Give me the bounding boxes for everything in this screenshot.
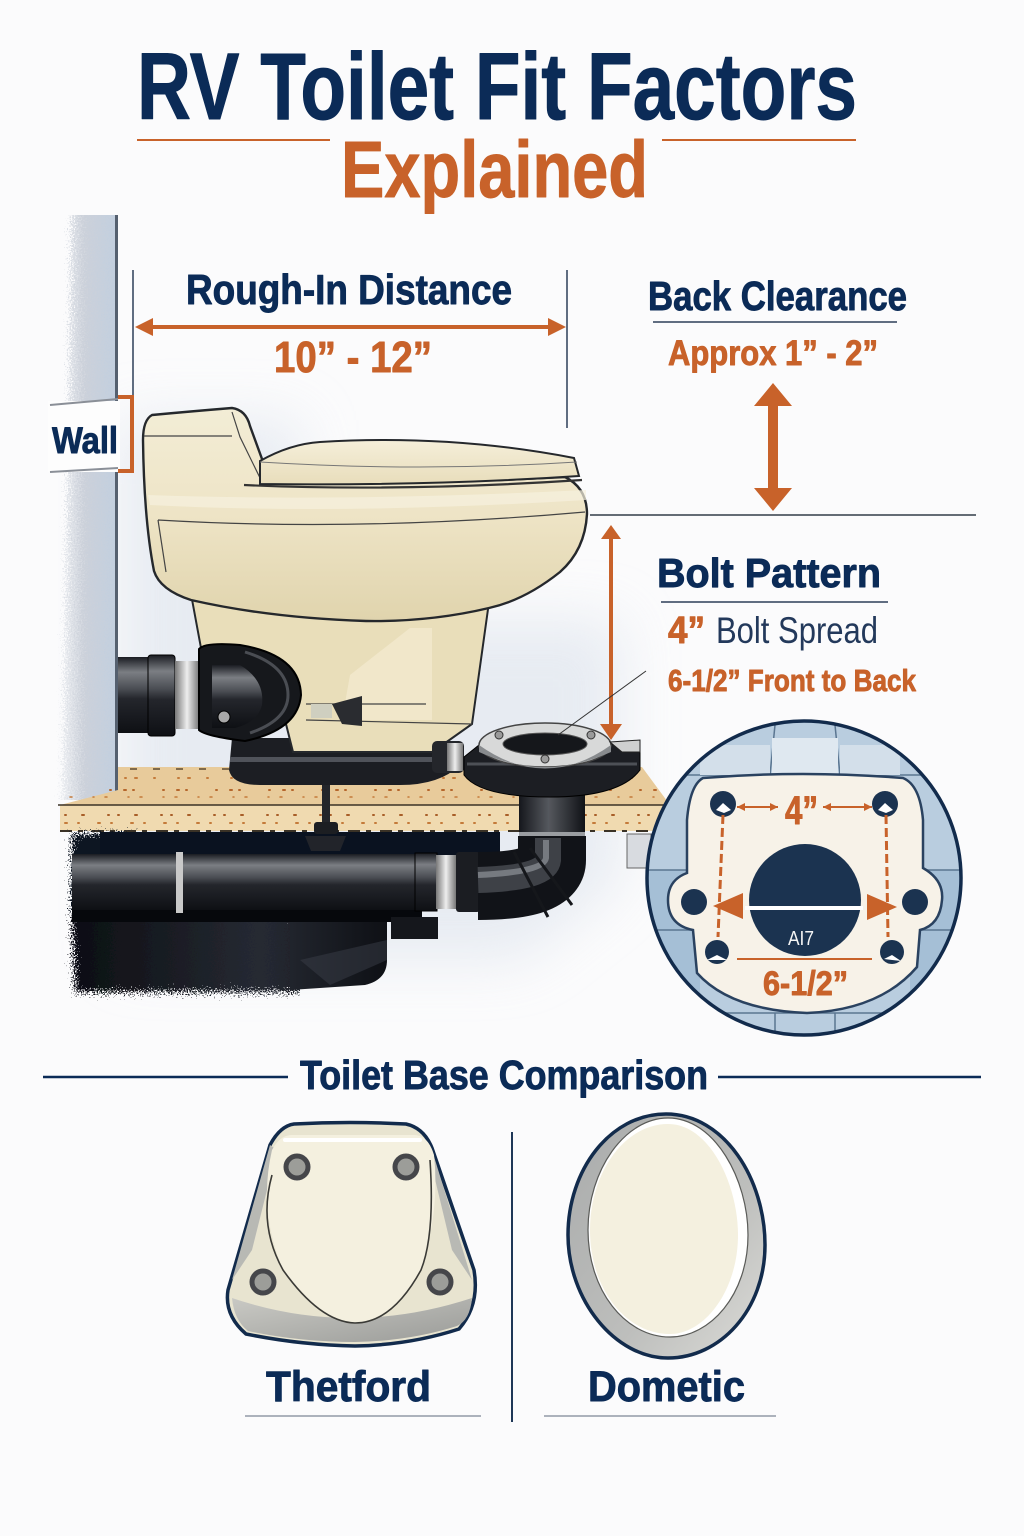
horizontal waste pipe xyxy=(72,852,480,913)
back clearance callout: Approx 1” - 2” xyxy=(668,334,878,373)
leader line xyxy=(558,671,646,735)
rough-in distance dimension: Rough-In Distance xyxy=(186,266,512,313)
toilet xyxy=(143,408,587,752)
back clearance callout xyxy=(590,273,976,515)
floor support bracket xyxy=(627,834,651,868)
bolt pattern callout: 6-1/2” Front to Back xyxy=(668,663,917,698)
pedestal xyxy=(191,594,489,752)
wall label: Wall xyxy=(52,420,118,461)
background shading behind toilet xyxy=(120,420,620,960)
bolt pattern detail circle xyxy=(640,721,970,1040)
bolt pattern detail circle: AI7 xyxy=(788,928,814,950)
back clearance callout: Back Clearance xyxy=(648,273,907,319)
bolt holes xyxy=(681,791,928,964)
dometic base xyxy=(568,1114,765,1358)
rough-in distance dimension: 10” - 12” xyxy=(274,333,432,382)
center drain xyxy=(749,844,861,956)
pipe elbow below flange xyxy=(478,793,585,917)
title: Explained xyxy=(341,125,648,214)
comparison heading: Toilet Base Comparison xyxy=(300,1052,708,1098)
floor flange xyxy=(432,723,640,797)
left supply pipe with elbow xyxy=(118,644,301,741)
mounting plate xyxy=(668,774,942,1013)
thetford label: Thetford xyxy=(266,1363,431,1411)
title xyxy=(137,34,857,214)
divider xyxy=(511,1132,513,1422)
bolt pattern callout xyxy=(657,550,917,698)
wall label xyxy=(48,397,132,472)
toilet base plate xyxy=(229,738,460,785)
bolt pattern callout: 4” xyxy=(668,610,705,652)
bolt pattern detail circle: 6-1/2” xyxy=(763,965,848,1003)
dometic label: Dometic xyxy=(588,1363,745,1411)
handle xyxy=(332,696,362,726)
rough-in distance dimension xyxy=(133,266,567,428)
bowl and tank xyxy=(143,408,587,621)
seat lid xyxy=(260,440,579,484)
bolt pattern callout: Bolt Spread xyxy=(716,610,878,651)
bolt pattern detail circle: 4” xyxy=(785,789,818,833)
bolt pattern callout: Bolt Pattern xyxy=(657,550,881,596)
floor bolt xyxy=(305,771,346,851)
thetford base xyxy=(227,1122,475,1346)
bowl height arrow xyxy=(600,525,622,740)
dimension arrows xyxy=(713,803,897,959)
wall xyxy=(54,215,118,800)
wood floor xyxy=(58,767,670,831)
waste tank and dark band under floor xyxy=(72,832,500,992)
